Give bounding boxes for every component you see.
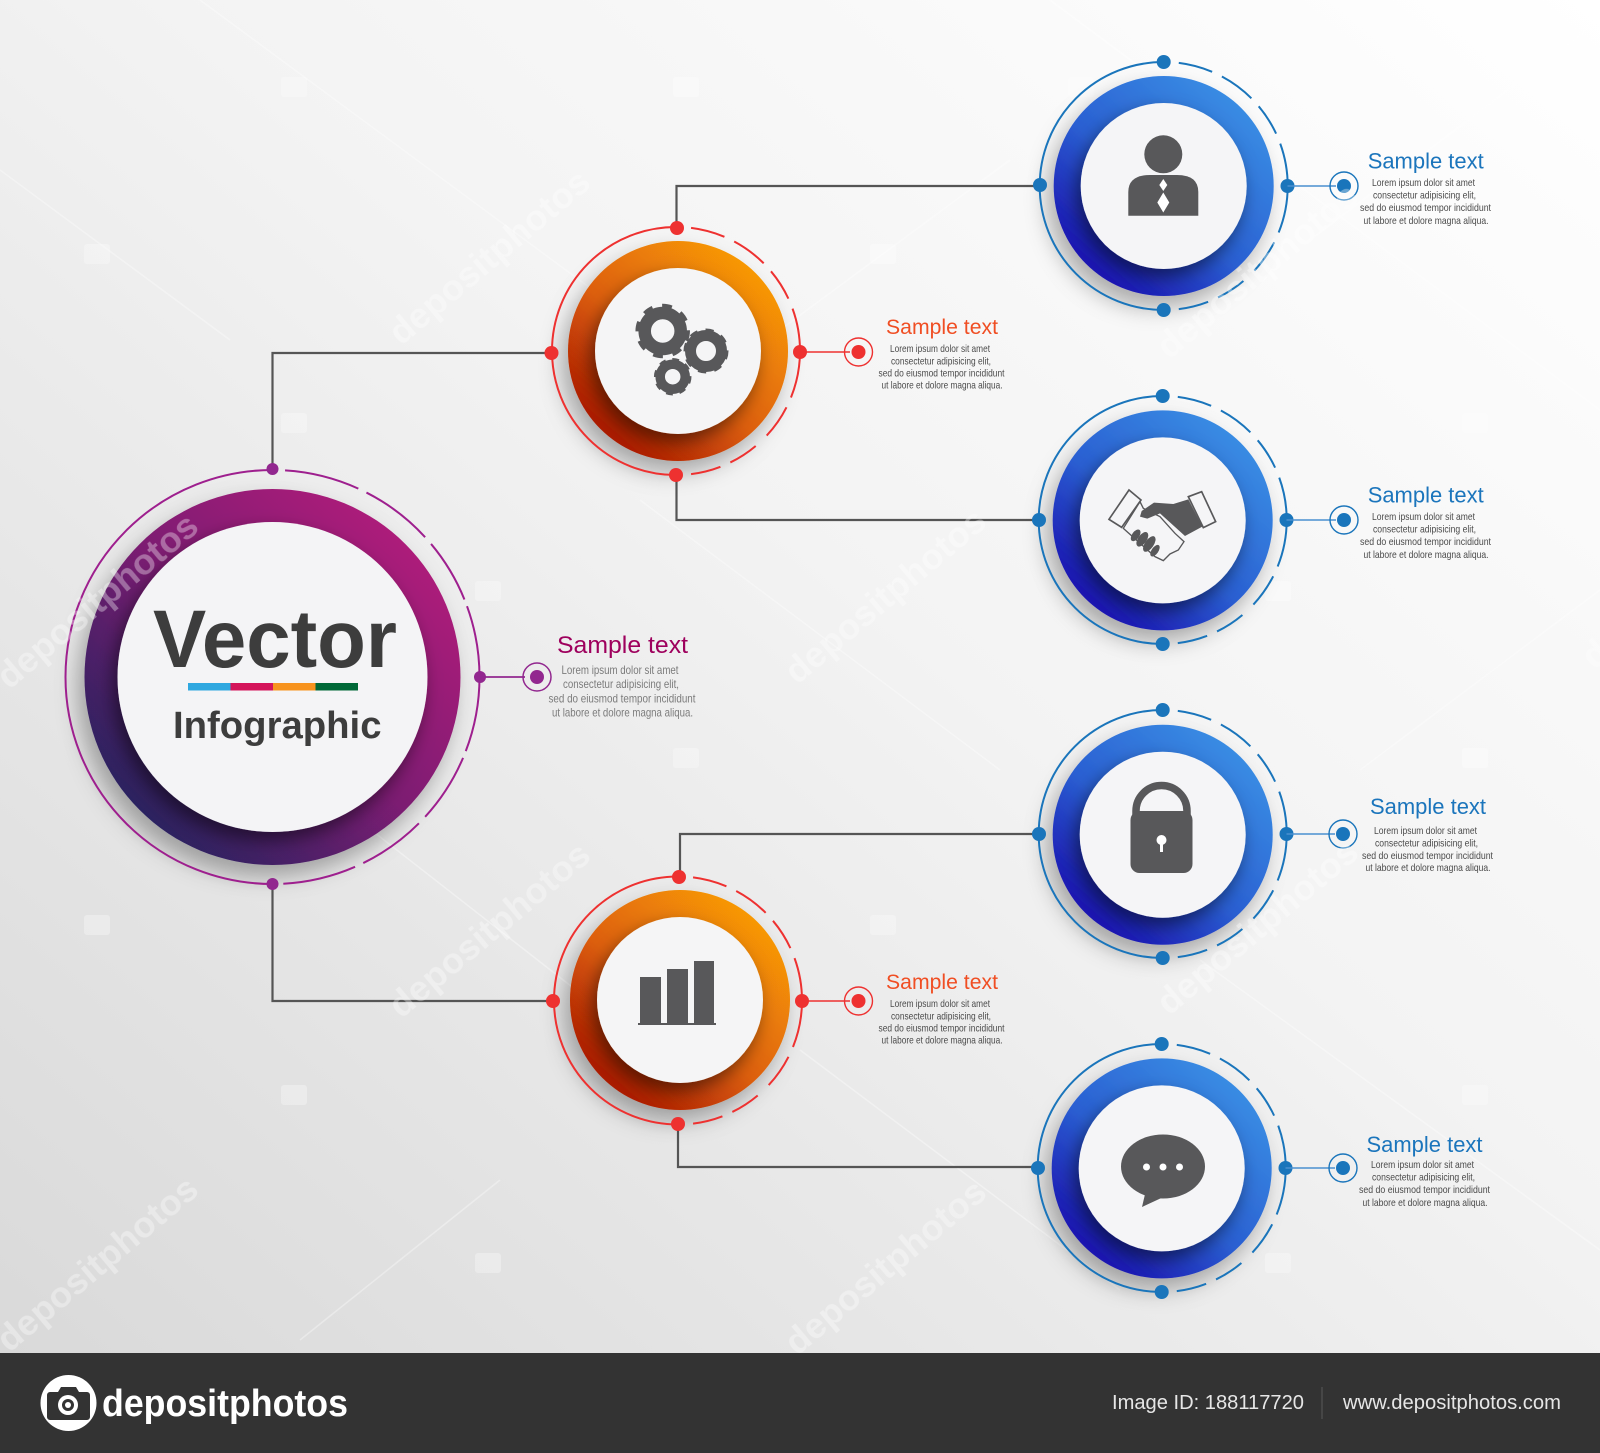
callout: person [1288,148,1491,227]
callout body: consectetur adipisicing elit, [563,677,679,691]
dots [1031,1037,1292,1299]
callout: lock [1286,794,1493,874]
heading: Infographic: Infographic [173,705,382,747]
body: ut labore et dolore magna aliqua. [882,380,1002,392]
ring [1054,76,1274,296]
thin ring [1038,1044,1286,1292]
body: sed do eiusmod tempor incididunt [878,1022,1005,1034]
main circle node [66,463,486,890]
disc [595,268,761,434]
logo wordmark: depositphotos [102,1383,348,1425]
icon: handshake [1109,490,1216,561]
body: sed do eiusmod tempor incididunt [1360,202,1491,214]
pointer [1286,820,1357,848]
callout: chat [1286,1132,1490,1209]
title: Sample text [1368,482,1484,508]
pointer [800,338,872,366]
body: ut labore et dolore magna aliqua. [1362,1197,1488,1209]
thin ring [1039,396,1287,644]
watermarks: depositphotos [1148,830,1366,1022]
pointer [802,987,872,1015]
icon: bar chart [638,961,716,1025]
node: person [1033,55,1294,317]
watermarks: depositphotos [776,1170,994,1362]
dots [544,221,807,482]
icon: chat bubble [1121,1134,1205,1207]
callout body [548,663,696,720]
title: Sample text [1368,148,1484,174]
dots [1032,389,1294,651]
watermarks: depositphotos [380,833,598,1025]
disc [597,917,763,1083]
main callout [480,632,696,720]
body: Lorem ipsum dolor sit amet [1371,1159,1474,1171]
callout: handshake [1286,482,1491,561]
callout body: sed do eiusmod tempor incididunt [548,692,696,706]
dots [1033,55,1294,317]
callout body: ut labore et dolore magna aliqua. [552,706,693,720]
callout: gears [800,316,1005,392]
title: Sample text [1366,1132,1482,1157]
main outer thin ring [66,470,480,884]
icon: gears [638,306,726,393]
body: consectetur adipisicing elit, [1375,838,1478,850]
watermarks: depositphotos [776,499,994,691]
title: Sample text [886,316,998,339]
icon: lock [1130,786,1192,873]
body [878,998,1005,1046]
body: ut labore et dolore magna aliqua. [882,1034,1002,1046]
colour bar [188,683,358,690]
ring [568,241,788,461]
ring [1052,1058,1272,1278]
body: sed do eiusmod tempor incididunt [1360,536,1491,548]
ring [1053,410,1273,630]
body: consectetur adipisicing elit, [1373,524,1476,536]
body: sed do eiusmod tempor incididunt [878,368,1005,380]
pointer [1288,172,1358,200]
body [878,343,1005,392]
body: ut labore et dolore magna aliqua. [1364,549,1488,561]
title: Sample text [886,971,998,994]
body: consectetur adipisicing elit, [1372,1172,1475,1184]
dots [1032,703,1294,965]
body [1359,1159,1490,1209]
node: chat [1031,1037,1292,1299]
body: consectetur adipisicing elit, [891,356,991,368]
node: gears [544,221,807,482]
pointer [1286,506,1358,534]
icon: depositphotos logo [40,1375,96,1431]
node: handshake [1032,389,1294,651]
disc [1081,103,1247,269]
body: sed do eiusmod tempor incididunt [1362,850,1493,862]
heading: Vector: Vector [153,594,397,685]
ring [1053,725,1273,945]
thin ring [554,876,802,1124]
main disc [118,522,428,832]
callout body: Lorem ipsum dolor sit amet [562,663,679,677]
thin ring [1039,710,1287,958]
body [1360,511,1491,561]
dots [546,870,809,1131]
body: Lorem ipsum dolor sit amet [1372,511,1475,523]
footer bar [0,1353,1600,1453]
footer background [0,1353,1600,1453]
node: lock [1032,703,1294,965]
body: Lorem ipsum dolor sit amet [890,998,990,1010]
body [1362,825,1493,874]
callout title: Sample text [557,632,688,659]
pointer [1286,1154,1357,1182]
disc [1079,1085,1245,1251]
website: www.depositphotos.com [1342,1392,1561,1414]
body: consectetur adipisicing elit, [891,1010,991,1022]
watermarks: depositphotos [380,160,598,352]
node: bar chart [546,870,809,1131]
image id: Image ID: 188117720 [1112,1392,1304,1414]
main ring [84,489,460,865]
title: Sample text [1370,794,1486,819]
thin ring [552,227,800,475]
thin ring [1040,62,1288,310]
connector lines [272,186,1040,1167]
body: Lorem ipsum dolor sit amet [1374,825,1477,837]
callout: bar chart [802,971,1005,1046]
disc [1080,437,1246,603]
body: ut labore et dolore magna aliqua. [1364,215,1488,227]
body: sed do eiusmod tempor incididunt [1359,1184,1490,1196]
icon: person [1128,135,1198,216]
disc [1080,752,1246,918]
body: ut labore et dolore magna aliqua. [1366,862,1490,874]
body [1360,177,1491,227]
pointer [480,663,551,691]
body: consectetur adipisicing elit, [1373,190,1476,202]
ring [570,890,790,1110]
node dots [266,463,486,890]
body: Lorem ipsum dolor sit amet [890,343,990,355]
body: Lorem ipsum dolor sit amet [1372,177,1475,189]
watermarks: depositphotos [1148,174,1366,366]
